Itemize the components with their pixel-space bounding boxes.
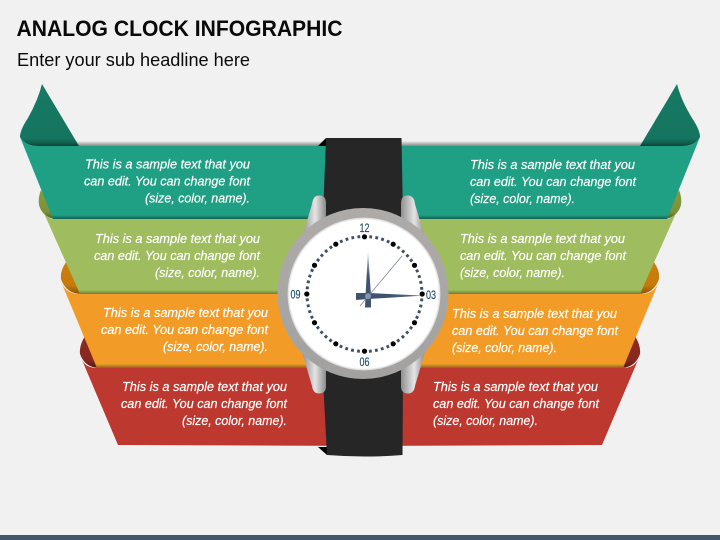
- teal text left: This is a sample text that you: [85, 158, 250, 172]
- hour dots: [304, 234, 425, 354]
- red text right: can edit. You can change font: [433, 397, 600, 411]
- title: ANALOG CLOCK INFOGRAPHIC: [16, 16, 342, 41]
- orange band right: [357, 261, 659, 368]
- clock numerals: 09: [290, 288, 301, 302]
- red text left: This is a sample text that you: [122, 380, 287, 394]
- teal band right with folded tab: [357, 84, 700, 219]
- green band left: [39, 190, 363, 294]
- red text right: (size, color, name).: [433, 414, 538, 428]
- watch lugs: [302, 196, 425, 394]
- green text right: can edit. You can change font: [460, 249, 627, 263]
- teal text left: can edit. You can change font: [84, 174, 251, 188]
- clock numerals: 06: [360, 355, 370, 369]
- minute tick dots: [307, 236, 422, 352]
- red band left: [80, 336, 363, 446]
- panel: red band: [80, 336, 640, 446]
- orange band left: [61, 261, 363, 368]
- shadow above teal band: [75, 141, 645, 146]
- orange text left: This is a sample text that you: [103, 306, 268, 320]
- clock hands: [356, 251, 423, 308]
- watch case ring: [278, 208, 448, 379]
- watch strap: [318, 138, 403, 456]
- clock face: [288, 218, 440, 370]
- teal text left: (size, color, name).: [145, 192, 250, 206]
- red text left: (size, color, name).: [182, 414, 287, 428]
- red band right: [357, 336, 640, 446]
- panel: orange band: [61, 261, 659, 368]
- subtitle: Enter your sub headline here: [17, 50, 250, 70]
- red text right: This is a sample text that you: [433, 380, 598, 394]
- teal text right: can edit. You can change font: [470, 175, 637, 189]
- panel: green band: [39, 190, 681, 294]
- green text left: This is a sample text that you: [95, 232, 260, 246]
- icon: wrist watch: [278, 138, 448, 456]
- red text left: can edit. You can change font: [121, 397, 288, 411]
- teal text right: This is a sample text that you: [470, 158, 635, 172]
- green text left: (size, color, name).: [155, 266, 260, 280]
- clock numerals: 12: [360, 221, 370, 235]
- orange text right: (size, color, name).: [452, 341, 557, 355]
- clock numerals: [290, 221, 436, 369]
- orange text left: (size, color, name).: [163, 340, 268, 354]
- green text left: can edit. You can change font: [94, 249, 261, 263]
- green text right: (size, color, name).: [460, 266, 565, 280]
- teal band left with folded tab: [20, 84, 363, 219]
- footer bar: [0, 535, 720, 540]
- green band right: [357, 190, 681, 294]
- panel: teal band: [20, 84, 700, 219]
- orange text left: can edit. You can change font: [101, 323, 269, 337]
- orange text right: can edit. You can change font: [452, 324, 619, 338]
- green text right: This is a sample text that you: [460, 232, 625, 246]
- clock numerals: 03: [426, 288, 436, 302]
- orange text right: This is a sample text that you: [452, 307, 617, 321]
- teal text right: (size, color, name).: [470, 192, 575, 206]
